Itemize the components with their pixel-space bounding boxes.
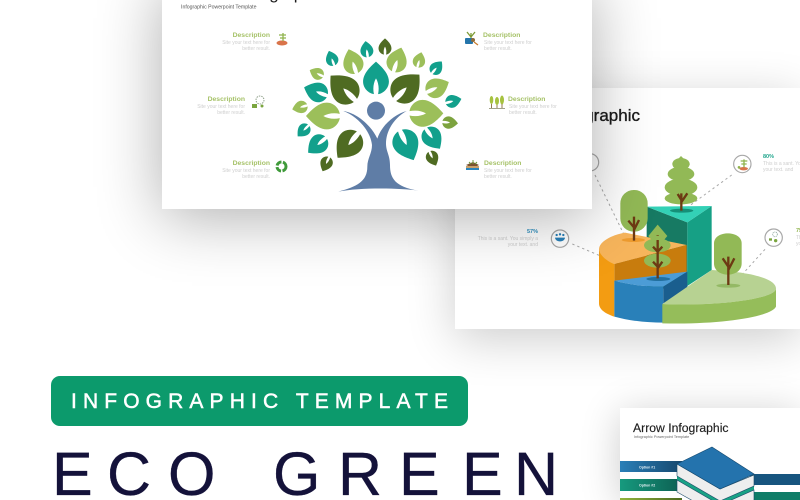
badge: infographic template [51, 376, 468, 426]
callout icon: 80% [734, 155, 751, 173]
icon: plant and magnifier [465, 32, 478, 45]
callout text: 7x% [796, 228, 800, 247]
description: middle left: Description [208, 96, 245, 103]
3D stepped pie chart [551, 154, 782, 324]
tree: bushy on green [714, 233, 742, 285]
description: top right: Description [483, 32, 520, 39]
badge label: INFOGRAPHIC TEMPLATE [71, 390, 448, 413]
teal wedge [647, 206, 712, 290]
description: bottom right: better result. [484, 174, 512, 180]
slide title: Arrow Infographic [633, 421, 729, 435]
description: top left: Description [233, 32, 270, 39]
tree leaves [291, 38, 463, 174]
orange wedge [599, 233, 687, 317]
icon: leaf cycle [252, 96, 264, 108]
description: top left: better result. [242, 46, 270, 52]
icon: recycle [277, 162, 286, 171]
description: middle right: better result. [509, 110, 537, 116]
tree: pine on teal [665, 156, 697, 211]
tree: layered on blue [644, 225, 671, 278]
callout text: 80% [763, 154, 800, 173]
description: top left [222, 32, 270, 52]
blue wedge [614, 272, 687, 323]
callout text: 80%: 80% [763, 154, 774, 160]
callout text: 57%: 57% [527, 229, 538, 235]
description: top right: Site your text here for [484, 40, 532, 46]
icon: three trees [489, 96, 505, 109]
description: middle left: better result. [217, 110, 245, 116]
description: middle right: Description [508, 96, 545, 103]
description: bottom left: better result. [242, 174, 270, 180]
description: bottom right: Description [484, 160, 521, 167]
description: middle left: Site your text here for [197, 104, 245, 110]
tree illustration [291, 38, 463, 192]
description: bottom right: Site your text here for [484, 168, 532, 174]
callout text: 57% [478, 229, 538, 248]
green wedge [662, 270, 776, 324]
callout text: 57%: This is a sant. You simply a [478, 236, 538, 242]
description: bottom left [222, 160, 270, 180]
description: middle left [197, 96, 245, 116]
dotted connector lines [572, 175, 765, 278]
callout icon: 7x% [765, 229, 782, 246]
human figure trunk [338, 102, 418, 192]
tree: round on orange [620, 190, 648, 241]
description: bottom left: Site your text here for [222, 168, 270, 174]
slide title: Infographic [556, 106, 640, 125]
icon: soil layers [466, 160, 479, 170]
description: bottom left: Description [233, 160, 270, 167]
description: top left: Site your text here for [222, 40, 270, 46]
panel: 3D pie chart slide [455, 88, 800, 329]
option bars: Option #1 [639, 466, 655, 470]
slide subtitle: Infographic Powerpoint Template [634, 435, 689, 439]
callout icon: partially hidden [581, 154, 599, 171]
callout icon: 57% [551, 230, 569, 247]
stacked books [677, 447, 754, 500]
panel: tree infographic slide [162, 0, 592, 209]
callout text: 80%: your text. and [763, 167, 794, 173]
slide subtitle: Infographic Powerpoint Template [181, 4, 257, 10]
option bars: Option #2 [639, 484, 655, 488]
icon: sprout [276, 33, 288, 46]
description: middle right [508, 96, 557, 116]
option bars [620, 461, 800, 500]
description: top right: better result. [484, 46, 512, 52]
panel: arrow infographic slide [620, 408, 800, 500]
description: middle right: Site your text here for [509, 104, 557, 110]
description: bottom right [484, 160, 532, 180]
description: top right [483, 32, 532, 52]
callout text: 57%: your text. and [508, 242, 538, 248]
